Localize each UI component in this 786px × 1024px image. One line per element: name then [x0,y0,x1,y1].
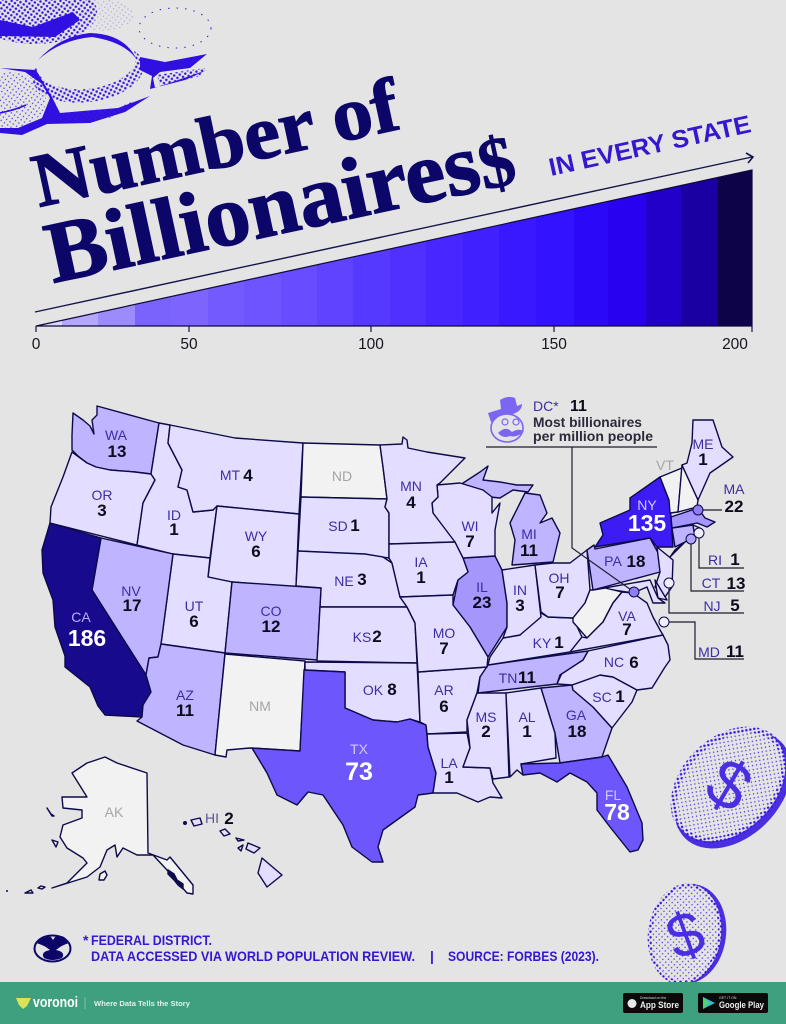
state: FL: 78 [604,799,630,825]
state: KY: 1 [554,633,564,652]
state: AL: 1 [522,722,532,741]
arrow: scale direction [35,153,753,312]
state: OR: 3 [97,501,107,520]
state: IA: 1 [416,568,426,587]
state: WI [432,483,500,558]
state: MN: 4 [406,493,416,512]
state: AL [506,688,556,777]
state: AZ: AZ [176,687,194,703]
icon: top-hat mascot [488,397,524,442]
state: MA [671,508,715,528]
icon: voronoi logo [16,998,31,1009]
state: ID: ID [167,507,181,523]
state: HI: 2 [224,809,234,828]
state: OH [535,550,590,618]
state: WI: WI [461,518,479,534]
state: GA: GA [566,707,587,723]
state: OK: OK [363,682,384,698]
state: MS [463,693,509,779]
title: Number of [25,63,408,224]
state: TX: TX [350,741,369,757]
state: ND [301,443,387,499]
callout: RI: 1 [730,550,740,569]
state: VT: VT [656,457,674,473]
callout: DC [486,397,657,597]
state: WI: 7 [465,532,475,551]
state: SC: 1 [615,687,625,706]
state: NJ [655,547,673,597]
state: KS: 2 [372,627,382,646]
state: MN: MN [400,478,422,494]
state: NC: 6 [629,653,639,672]
state: TX [252,670,436,862]
state: NY: NY [637,497,657,513]
state: AL: AL [518,709,536,725]
badge: App Store [623,993,683,1013]
state: NV: 17 [123,596,141,615]
state: LA: LA [440,755,458,771]
badge: Google Play: Google Play [719,1000,764,1010]
state: NV: NV [121,583,141,599]
state: IL: 23 [473,593,491,612]
state: AZ: 11 [176,701,194,720]
state: WY: 6 [251,542,261,561]
state: NE: 3 [357,570,367,589]
state: PA [587,538,662,590]
callout: MA [693,481,745,516]
illustration: halftone coin right: $ [694,743,764,827]
legend: wedge colour scale [36,160,752,330]
callout: NJ: NJ [703,598,721,614]
state: DE [655,580,667,600]
wordmark: voronoi [33,995,78,1011]
callout: MA: MA [724,481,745,497]
state: MO: 7 [439,639,449,658]
footnote and source [83,932,599,964]
state: NC [557,635,670,690]
callout: CT [686,534,745,593]
state: CO: CO [260,603,282,619]
title [25,63,523,302]
callout: RI: RI [708,552,722,568]
state: MT [168,425,303,514]
state: TN: TN [499,670,517,686]
state: MO: MO [433,625,455,641]
axis: tick marks and labels [32,326,752,353]
state: CA: 186 [68,625,106,651]
callout: MD: 11 [726,642,744,661]
axis: tick marks and labels: 0 [32,336,41,353]
callout: CT: 13 [727,574,745,593]
state: WA: WA [105,427,128,443]
state: TN [478,651,588,693]
callout: DC: 11 [570,398,587,415]
footnote and source: | [430,948,434,964]
state: ND: ND [332,468,352,484]
footnote and source: SOURCE: FORBES (2023). [448,948,599,964]
axis: tick marks and labels: 100 [358,336,384,353]
state: SD: SD [328,518,348,534]
state: KS: KS [353,629,371,645]
callout: DC: DC* [533,398,559,414]
state: NV [92,538,173,675]
state: CA: CA [71,609,91,625]
state: NC: NC [604,654,624,670]
callout: DC: per million people [533,429,654,444]
state: AR: AR [434,682,454,698]
footnote and source: FEDERAL DISTRICT. [91,932,212,948]
icon: voronoi mask logo [34,936,70,962]
callout: MD [659,617,744,661]
axis: tick marks and labels: 200 [722,336,748,353]
state: KY [488,613,582,665]
state: TN: 11 [518,668,536,687]
callout: RI [694,528,744,569]
state: UT [161,554,232,653]
state: NE [296,551,407,607]
state: IL: IL [476,579,488,595]
state: MO [400,595,488,672]
state: GA [541,685,612,763]
state: FL [521,755,643,852]
map: US states [6,406,733,894]
illustration: halftone coin right [651,707,786,871]
state: AR: 6 [439,697,449,716]
illustration: pile of halftone coins [0,0,211,135]
state: SC: SC [592,689,612,705]
state: CT [672,525,695,547]
state: OK: 8 [387,680,397,699]
state: FL: FL [605,787,621,803]
state: ID: 1 [169,520,179,539]
state: OR: OR [92,487,112,503]
state: NY [595,477,687,557]
badge: Google Play: GET IT ON [719,996,737,1000]
state: SD: 1 [350,516,360,535]
state: HI: HI [205,810,219,826]
state: NM [215,654,305,757]
state: ID [137,423,217,558]
state: NE: NE [334,573,354,589]
state: TX: 73 [345,758,373,786]
state: NM: NM [249,698,271,714]
state: WV [573,588,622,638]
state: PA: 18 [627,552,645,571]
state: MS: MS [476,709,496,725]
callout: DC: Most billionaires [533,415,642,430]
state: OK [305,662,420,722]
state: OH: OH [548,570,570,586]
state: AK: AK [105,804,124,820]
state: VA: VA [618,608,636,624]
state: MD [593,580,665,603]
title: $ [470,120,523,206]
state: NH [678,465,698,512]
badge: App Store: App Store [640,1000,679,1010]
state: VT [656,457,682,513]
state: MN [380,437,465,544]
state: NY: 135 [628,510,666,536]
state: AZ [137,644,225,755]
title: Billionaires [37,114,488,302]
callout: NJ: 5 [730,596,740,615]
state: WY: WY [245,528,268,544]
state: AR [418,667,487,734]
state: MI: MI [521,526,537,542]
badge: Google Play [698,993,768,1013]
state: UT: UT [185,598,204,614]
callout: MA: 22 [725,497,743,516]
state: CA [42,523,151,717]
state: WA [72,406,159,474]
state: WA: 13 [108,442,126,461]
state: MI [460,466,560,565]
state: CO: 12 [262,617,280,636]
state: MT: MT [220,467,241,483]
callout: CT: CT [702,575,721,591]
state: OR [50,452,155,545]
state: LA [427,733,502,802]
state: CO [225,582,321,660]
footnote and source: DATA ACCESSED VIA WORLD POPULATION REVIEW. [91,948,415,964]
state: LA: 1 [444,768,454,787]
axis: tick marks and labels: 50 [180,336,198,353]
illustration: halftone coin bottom: $ [658,897,714,974]
state: IA [389,542,468,597]
state: IN: IN [513,582,527,598]
state: ME: ME [692,436,714,452]
axis: tick marks and labels: 150 [541,336,567,353]
state: MT: 4 [243,466,253,485]
state: MS: 2 [481,722,491,741]
state: MI: 11 [520,541,538,560]
state: WY [208,506,299,587]
state: KY: KY [533,635,552,651]
state: AK [6,757,193,894]
state: VA: 7 [622,620,632,639]
state: IA: IA [414,554,428,570]
state: HI [183,809,282,887]
state: UT: 6 [189,612,199,631]
state: ME: 1 [698,450,708,469]
state: IL [453,556,507,657]
callout: MD: MD [698,644,720,660]
tagline: Where Data Tells the Story [94,999,191,1008]
state: SC [572,675,637,728]
illustration: halftone coin bottom [642,879,733,989]
subtitle: IN EVERY STATE [546,110,753,182]
footer band [0,982,786,1024]
state: VA [570,592,663,652]
state: GA: 18 [568,722,586,741]
callout: NJ [664,578,744,615]
state: ME [682,420,733,500]
footnote and source: * [83,932,89,948]
state: SD [298,497,389,558]
state: PA: PA [604,553,622,569]
state: IN [502,565,541,638]
state: OH: 7 [555,583,565,602]
state: RI [692,524,701,532]
badge: App Store: Download on the [640,996,666,1000]
state: KS [317,607,417,663]
state: IN: 3 [515,596,525,615]
